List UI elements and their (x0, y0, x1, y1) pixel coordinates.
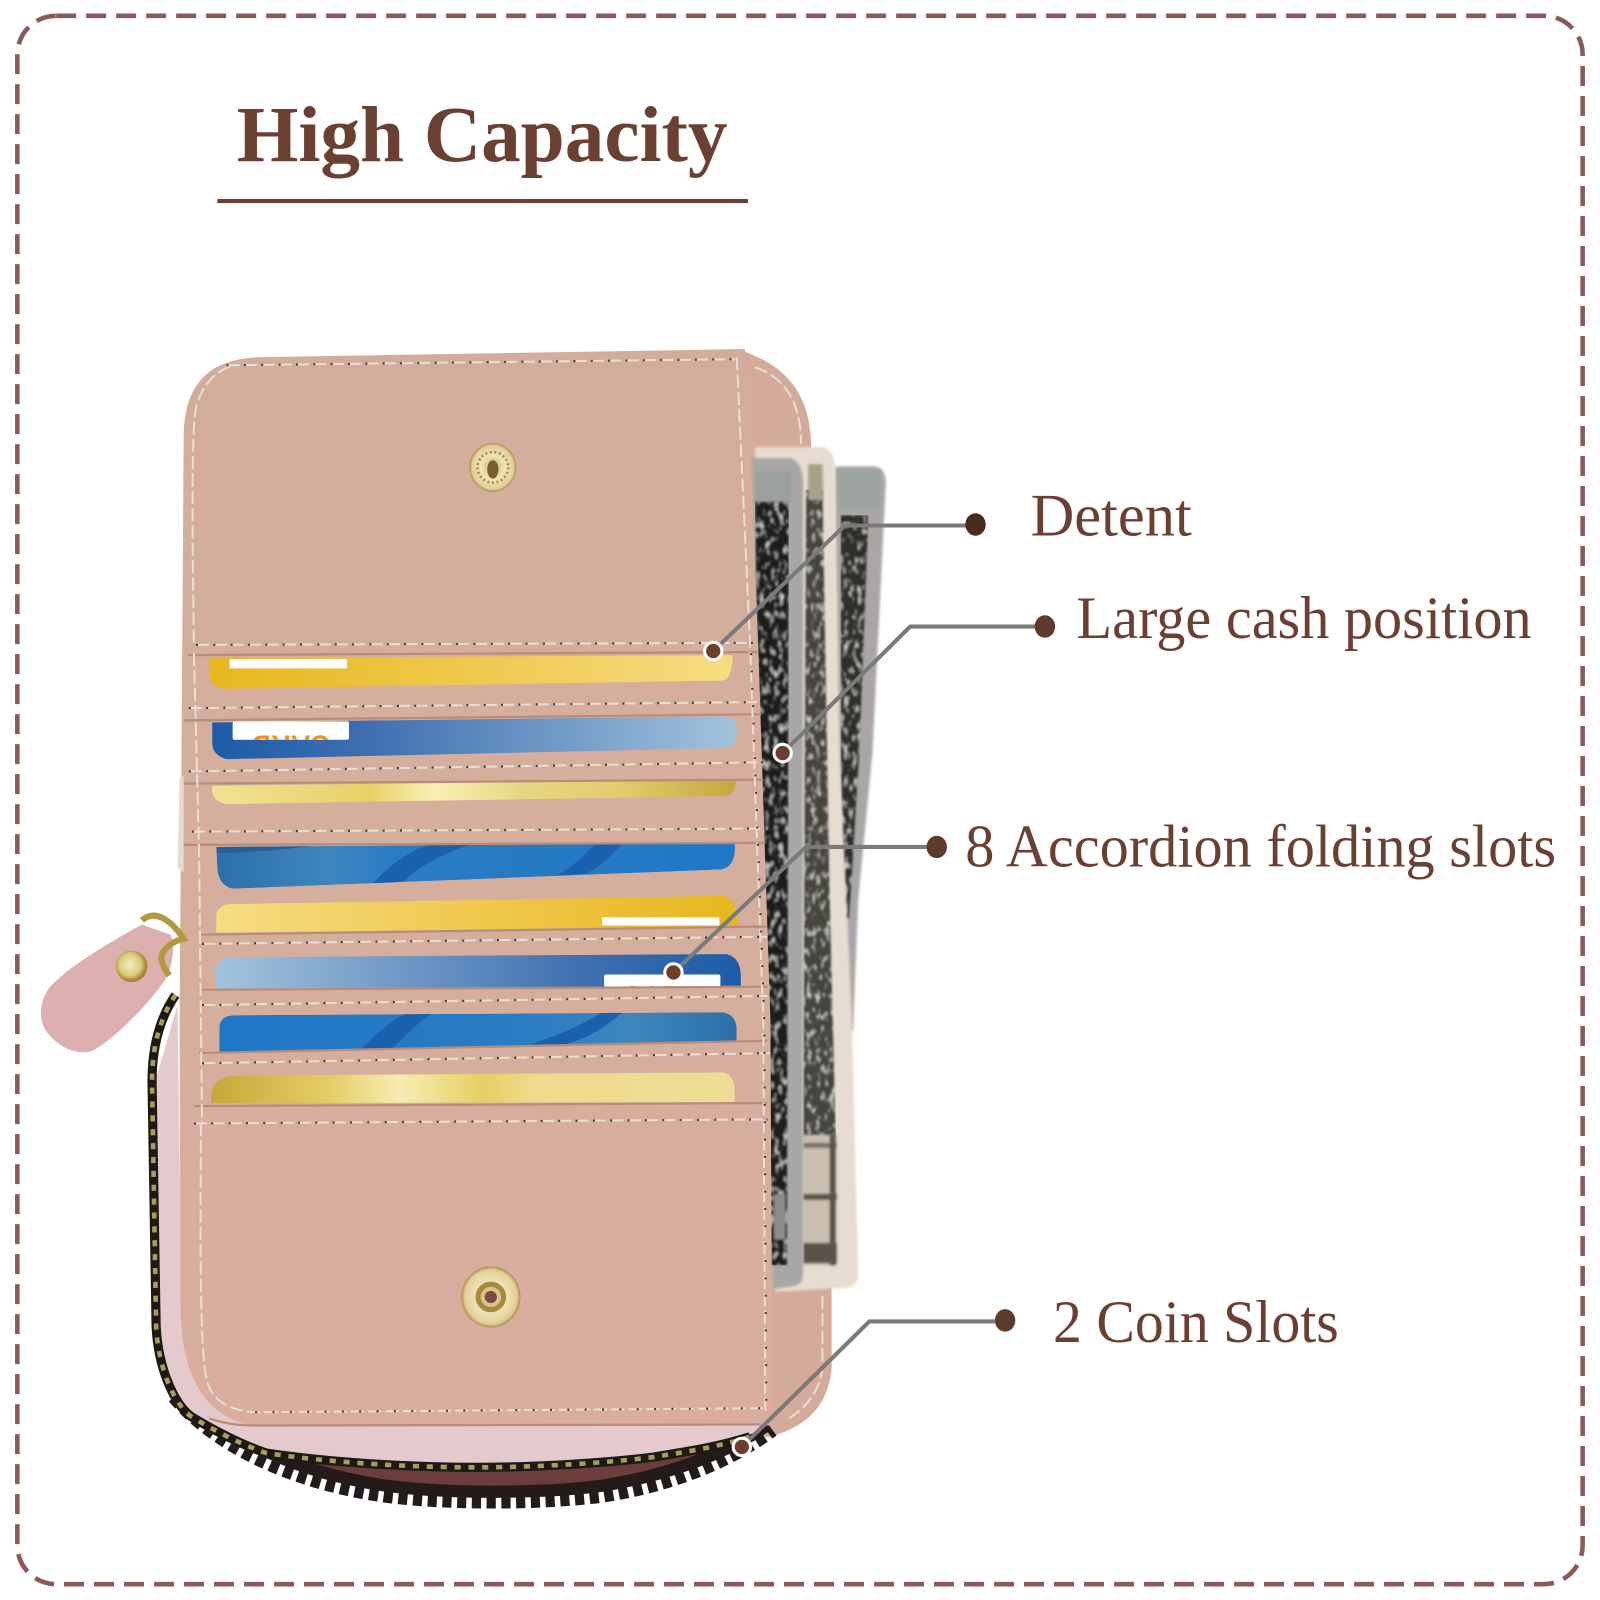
start marker (733, 1438, 751, 1456)
wallet main interior panel (180, 349, 772, 1426)
callout: 2 Coin Slots (733, 1289, 1339, 1456)
snap button bottom (461, 1266, 520, 1328)
card 6: light blue (215, 954, 741, 988)
end marker (995, 1309, 1015, 1332)
label: 2 Coin Slots (1053, 1289, 1339, 1356)
label: Large cash position (1077, 585, 1532, 652)
leader line (713, 526, 967, 651)
end marker (1035, 615, 1055, 638)
pull rivet (116, 951, 147, 982)
zipper solid tape (184, 1392, 765, 1492)
zipper beads (152, 995, 750, 1467)
card 7: blue (219, 1012, 737, 1053)
start marker (665, 964, 682, 981)
card 2: blue (212, 716, 737, 761)
bill: back gray print (841, 515, 868, 918)
title: High Capacity (237, 91, 728, 179)
card 8: gold (211, 1072, 735, 1103)
stitching (189, 357, 822, 1420)
zipper teeth (176, 1396, 771, 1500)
snap button top (469, 443, 516, 492)
bill: beige print band (803, 490, 836, 1138)
card 6 label (604, 974, 720, 987)
bill: front gray lower patch (773, 1194, 786, 1240)
title underline (217, 199, 748, 203)
card 4 swooshes (372, 843, 622, 884)
bill: front gray top band (756, 471, 791, 502)
pocket edges (184, 652, 767, 1426)
stitch holes (189, 359, 770, 1413)
pink lining (155, 1005, 760, 1467)
bill: beige top print (808, 464, 823, 500)
card 4: blue (216, 843, 735, 889)
zipper bead backing (152, 995, 750, 1467)
end marker (965, 513, 986, 536)
start marker (774, 744, 791, 762)
pull leather (41, 924, 173, 1052)
card 6 label text: CARD (622, 980, 702, 1011)
callout: Large cash position (774, 585, 1532, 762)
callout: Detent (705, 483, 1192, 660)
leader line (742, 1321, 995, 1447)
zip pull tab (41, 916, 184, 1052)
cash bills (752, 447, 886, 1292)
card 5 label (602, 917, 719, 926)
card 2 label (233, 721, 349, 740)
label: 8 Accordion folding slots (965, 813, 1556, 880)
leader line (673, 847, 929, 972)
callout: 8 Accordion folding slots (665, 813, 1556, 981)
leader line (783, 627, 1036, 753)
end marker (927, 836, 947, 858)
bill: back gray top band (838, 469, 881, 510)
wallet back body (740, 350, 832, 1437)
bill: front gray (752, 458, 803, 1289)
card 1: yellow (209, 655, 733, 689)
card 3: gold (212, 780, 737, 804)
fold highlight (178, 776, 184, 872)
card 5: yellow (216, 896, 739, 933)
bill: corner numeral (803, 1135, 837, 1265)
start marker (705, 642, 722, 660)
wallet photo (41, 349, 886, 1500)
card 7 swooshes (362, 1012, 622, 1048)
card 2 label text: CARD (251, 730, 331, 761)
bill: beige (755, 447, 858, 1292)
card 1 label (230, 659, 347, 668)
label: Detent (1031, 483, 1192, 550)
bill: front gray print (755, 500, 789, 1265)
zipper dark band (182, 1400, 765, 1494)
bill: back gray (835, 466, 886, 1031)
pull ring (142, 916, 184, 976)
